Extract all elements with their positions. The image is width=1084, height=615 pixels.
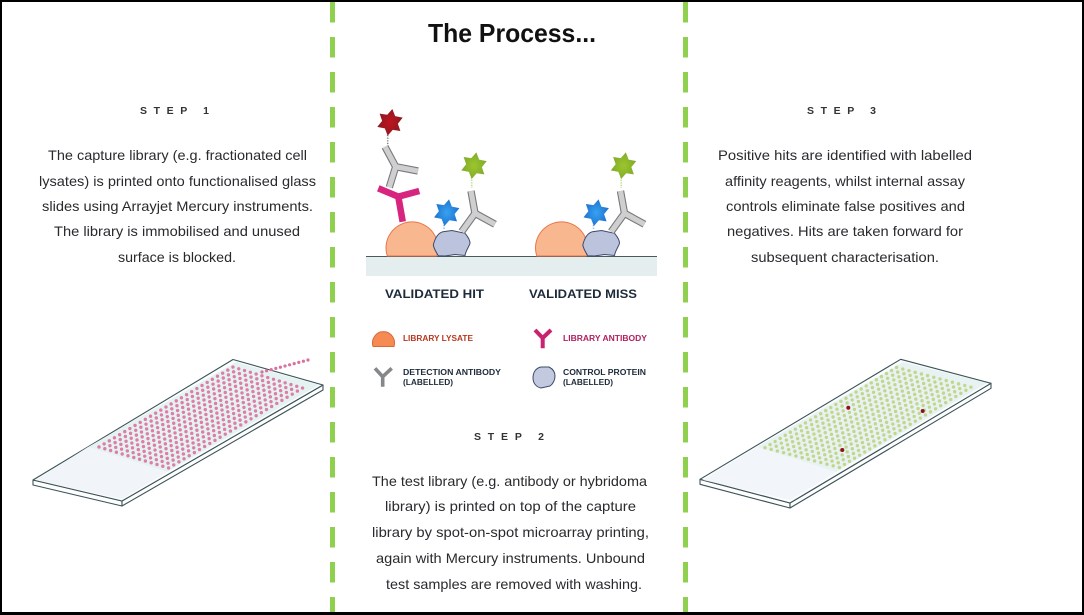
step 2 heading: STEP 2 xyxy=(474,431,544,443)
legend text: detection antibody xyxy=(403,368,502,387)
step 2 body text: test samples are removed with washing. xyxy=(386,576,642,592)
slide illustration: pink capture library xyxy=(33,358,323,506)
label: validated hit: VALIDATED HIT xyxy=(385,289,484,301)
label: validated miss: VALIDATED MISS xyxy=(529,289,637,301)
green star xyxy=(460,150,488,181)
step 2 body text: library) is printed on top of the capture xyxy=(385,498,636,514)
step 1 body text: surface is blocked. xyxy=(118,249,236,265)
green star xyxy=(610,150,637,181)
legend xyxy=(373,330,648,388)
printing droplets xyxy=(260,358,310,374)
library lysate xyxy=(386,222,438,256)
step 3 body text: Positive hits are identified with labelled xyxy=(718,147,972,163)
step 2 body text xyxy=(372,473,649,592)
dotted linkers xyxy=(388,135,472,230)
dotted linkers xyxy=(594,177,621,230)
diagram: validated miss xyxy=(536,150,644,256)
legend text: library antibody: LIBRARY ANTIBODY xyxy=(563,334,648,343)
step 1 body text: lysates) is printed onto functionalised glass xyxy=(39,173,316,189)
detection antibody on library antibody xyxy=(385,147,418,187)
legend icon: library lysate xyxy=(373,332,394,346)
legend text: control protein: (LABELLED) xyxy=(563,378,613,387)
green dashed divider: right xyxy=(683,2,688,613)
glass surface xyxy=(366,256,657,276)
green dashed divider: left xyxy=(330,2,335,613)
printed spot array xyxy=(99,367,303,468)
detection antibody on control protein xyxy=(611,191,644,232)
control protein xyxy=(433,230,470,256)
library antibody xyxy=(378,188,419,222)
step 3 body text: subsequent characterisation. xyxy=(751,249,939,265)
positive hit spots xyxy=(840,406,925,452)
step 3 heading: STEP 3 xyxy=(807,105,876,117)
panel: the process (centre) xyxy=(366,107,657,592)
step 2 body text: The test library (e.g. antibody or hybridoma xyxy=(372,473,647,489)
legend icon: detection antibody xyxy=(375,368,392,387)
legend text: detection antibody: (LABELLED) xyxy=(403,378,453,387)
legend icon: library antibody xyxy=(535,330,551,348)
step 1 heading: STEP 1 xyxy=(140,105,209,117)
step 3 body text: controls eliminate false positives and xyxy=(726,198,965,214)
red star xyxy=(376,107,404,138)
step 3 body text: negatives. Hits are taken forward for xyxy=(727,223,963,239)
panel: step 1 xyxy=(33,105,323,506)
step 1 body text: The library is immobilised and unused xyxy=(54,223,300,239)
legend text: control protein xyxy=(563,368,646,387)
legend text: control protein: CONTROL PROTEIN xyxy=(563,368,646,377)
step 2 body text: again with Mercury instruments. Unbound xyxy=(376,550,645,566)
control protein xyxy=(583,230,620,256)
slide illustration: green hits xyxy=(700,359,991,508)
step 1 body text xyxy=(39,147,316,265)
library lysate xyxy=(536,222,588,256)
printed spot array xyxy=(765,367,971,468)
step 1 body text: slides using Arrayjet Mercury instruments. xyxy=(42,198,313,214)
legend icon: control protein xyxy=(533,367,555,388)
title: The Process... xyxy=(428,18,596,48)
blue star xyxy=(433,197,461,228)
diagram: validated hit xyxy=(376,107,495,256)
step 2 body text: library by spot-on-spot microarray printing, xyxy=(372,524,649,540)
panel: step 3 xyxy=(700,105,991,508)
legend text: library lysate: LIBRARY LYSATE xyxy=(403,334,474,343)
blue star xyxy=(582,197,610,228)
detection antibody on control protein xyxy=(462,191,495,232)
legend text: detection antibody: DETECTION ANTIBODY xyxy=(403,368,502,377)
step 3 body text: affinity reagents, whilst internal assay xyxy=(725,173,965,189)
step 3 body text xyxy=(718,147,972,265)
step 1 body text: The capture library (e.g. fractionated cell xyxy=(48,147,307,163)
